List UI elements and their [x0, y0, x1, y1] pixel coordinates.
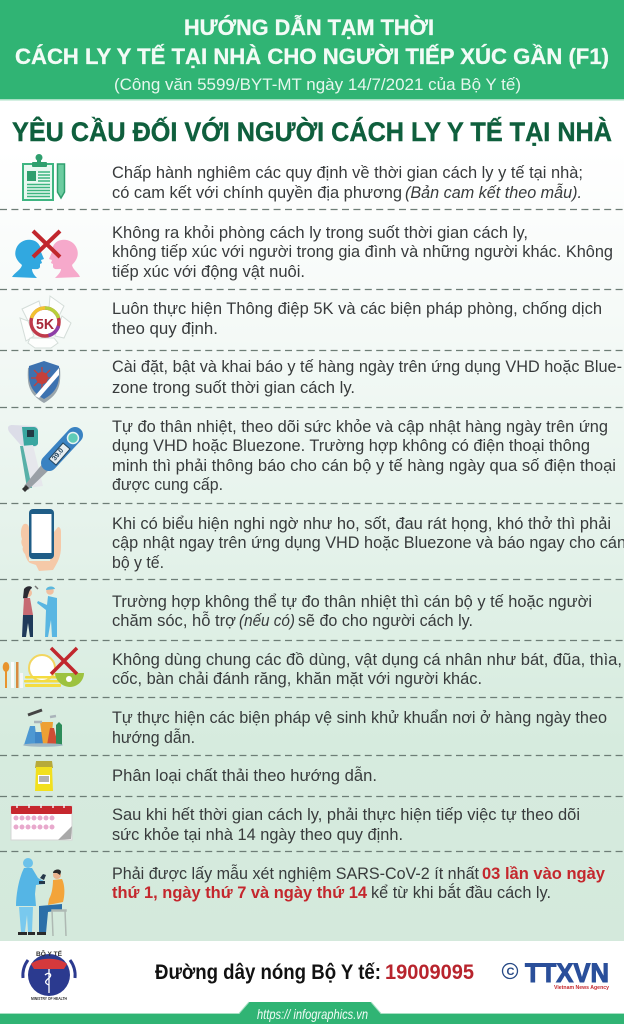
header banner [0, 0, 624, 100]
item 12 text [112, 864, 606, 902]
item 5 text [112, 417, 616, 494]
item 7 text: Trường hợp không thể tự đo thân nhiệt thì cán bộ y tế hoặc người [112, 592, 592, 611]
icon: two heads crossed out [12, 231, 80, 278]
footer bar with URL tab: https:// infographics.vn [257, 1006, 368, 1022]
item 1 text [112, 163, 583, 202]
title line 1: HƯỚNG DẪN TẠM THỜI [184, 14, 434, 40]
item 4 text: zone trong suốt thời gian cách ly. [112, 378, 355, 397]
copyright symbol [502, 964, 518, 978]
footer logo: Ministry of Health [23, 950, 75, 1001]
item 7 text: chăm sóc, hỗ trợ [112, 611, 236, 630]
item 1 text: Chấp hành nghiêm các quy định về thời gian cách ly y tế tại nhà; [112, 163, 583, 182]
icon: hand holding phone [21, 509, 61, 571]
item 9 text: hướng dẫn. [112, 728, 195, 747]
icon: dishes crossed out [3, 648, 84, 688]
title line 2: CÁCH LY Y TẾ TẠI NHÀ CHO NGƯỜI TIẾP XÚC GẦN (F1) [15, 44, 609, 69]
icon: 5K message: 5K [36, 316, 54, 333]
hotline: 19009095 [385, 961, 474, 984]
item 3 text: theo quy định. [112, 319, 218, 338]
icon: thermometers: 39.0 [51, 447, 65, 462]
item 5 text: minh thì phải thông báo cho cán bộ y tế hàng ngày qua số điện thoại [112, 456, 616, 475]
item 8 text: cốc, bàn chải đánh răng, khăn mặt với người khác. [112, 669, 482, 688]
item 1 text: (Bản cam kết theo mẫu). [405, 183, 582, 202]
item 5 text: dụng VHD hoặc Bluezone. Trường hợp không có điện thoại thông [112, 436, 590, 455]
item 4 text [112, 357, 622, 397]
item 11 text [112, 805, 580, 844]
item 6 text: Khi có biểu hiện nghi ngờ như ho, sốt, đau rát họng, khó thở thì phải [112, 514, 611, 533]
item 2 text [112, 223, 613, 281]
item 2 text: không tiếp xúc với người trong gia đình và những người khác. Không [112, 242, 613, 261]
subtitle: (Công văn 5599/BYT-MT ngày 14/7/2021 của Bộ Y tế) [114, 75, 521, 94]
item 9 text [112, 708, 607, 747]
item 7 text [112, 592, 592, 630]
item 12 text: Phải được lấy mẫu xét nghiệm SARS-CoV-2 ít nhất [112, 864, 479, 883]
icon: clipboard and pen [23, 154, 64, 200]
icon: calendar [11, 804, 72, 840]
item 9 text: Tự thực hiện các biện pháp vệ sinh khử khuẩn nơi ở hàng ngày theo [112, 708, 607, 727]
footer logo: Ministry of Health: BỘ Y TẾ [36, 950, 62, 958]
icon: sample collection [16, 858, 66, 936]
item 6 text: bộ y tế. [112, 553, 164, 572]
item 5 text: Tự đo thân nhiệt, theo dõi sức khỏe và cập nhật hàng ngày trên ứng [112, 417, 608, 436]
logo: TTXVN: Vietnam News Agency [554, 985, 610, 991]
item 7 text: (nếu có) [239, 611, 295, 630]
panel: requirements background [0, 150, 624, 941]
item 6 text [112, 514, 624, 572]
item 5 text: được cung cấp. [112, 475, 223, 494]
item 3 text [112, 299, 602, 338]
item 11 text: sức khỏe tại nhà 14 ngày theo quy định. [112, 825, 403, 844]
item 12 text: 03 lần vào ngày [482, 864, 606, 883]
item 12 text: kể từ khi bắt đầu cách ly. [371, 883, 551, 902]
icon: virus shield [28, 361, 60, 403]
item 2 text: Không ra khỏi phòng cách ly trong suốt thời gian cách ly, [112, 223, 528, 242]
item 2 text: tiếp xúc với động vật nuôi. [112, 262, 305, 281]
logo: TTXVN: TTXVN [525, 958, 609, 988]
item 7 text: sẽ đo cho người cách ly. [298, 611, 473, 630]
item 8 text: Không dùng chung các đồ dùng, vật dụng cá nhân như bát, đũa, thìa, [112, 650, 622, 669]
icon: cleaning supplies [23, 710, 63, 747]
icon: temperature check [22, 586, 57, 637]
item 3 text: Luôn thực hiện Thông điệp 5K và các biện pháp phòng, chống dịch [112, 299, 602, 318]
footer logo: Ministry of Health: MINISTRY OF HEALTH [31, 996, 67, 1001]
item 1 text: có cam kết với chính quyền địa phương [112, 183, 402, 202]
item 8 text [112, 650, 622, 688]
icon: 5K message [20, 296, 71, 348]
item 10 text: Phân loại chất thải theo hướng dẫn. [112, 766, 377, 785]
copyright symbol: C [506, 966, 514, 978]
hotline: Đường dây nóng Bộ Y tế: [155, 961, 381, 984]
footer bar with URL tab [0, 1002, 624, 1024]
item 11 text: Sau khi hết thời gian cách ly, phải thực hiện tiếp việc tự theo dõi [112, 805, 580, 824]
icon: thermometers [8, 425, 78, 492]
icon: yellow waste bin [35, 761, 53, 791]
item 12 text: thứ 1, ngày thứ 7 và ngày thứ 14 [112, 883, 368, 902]
